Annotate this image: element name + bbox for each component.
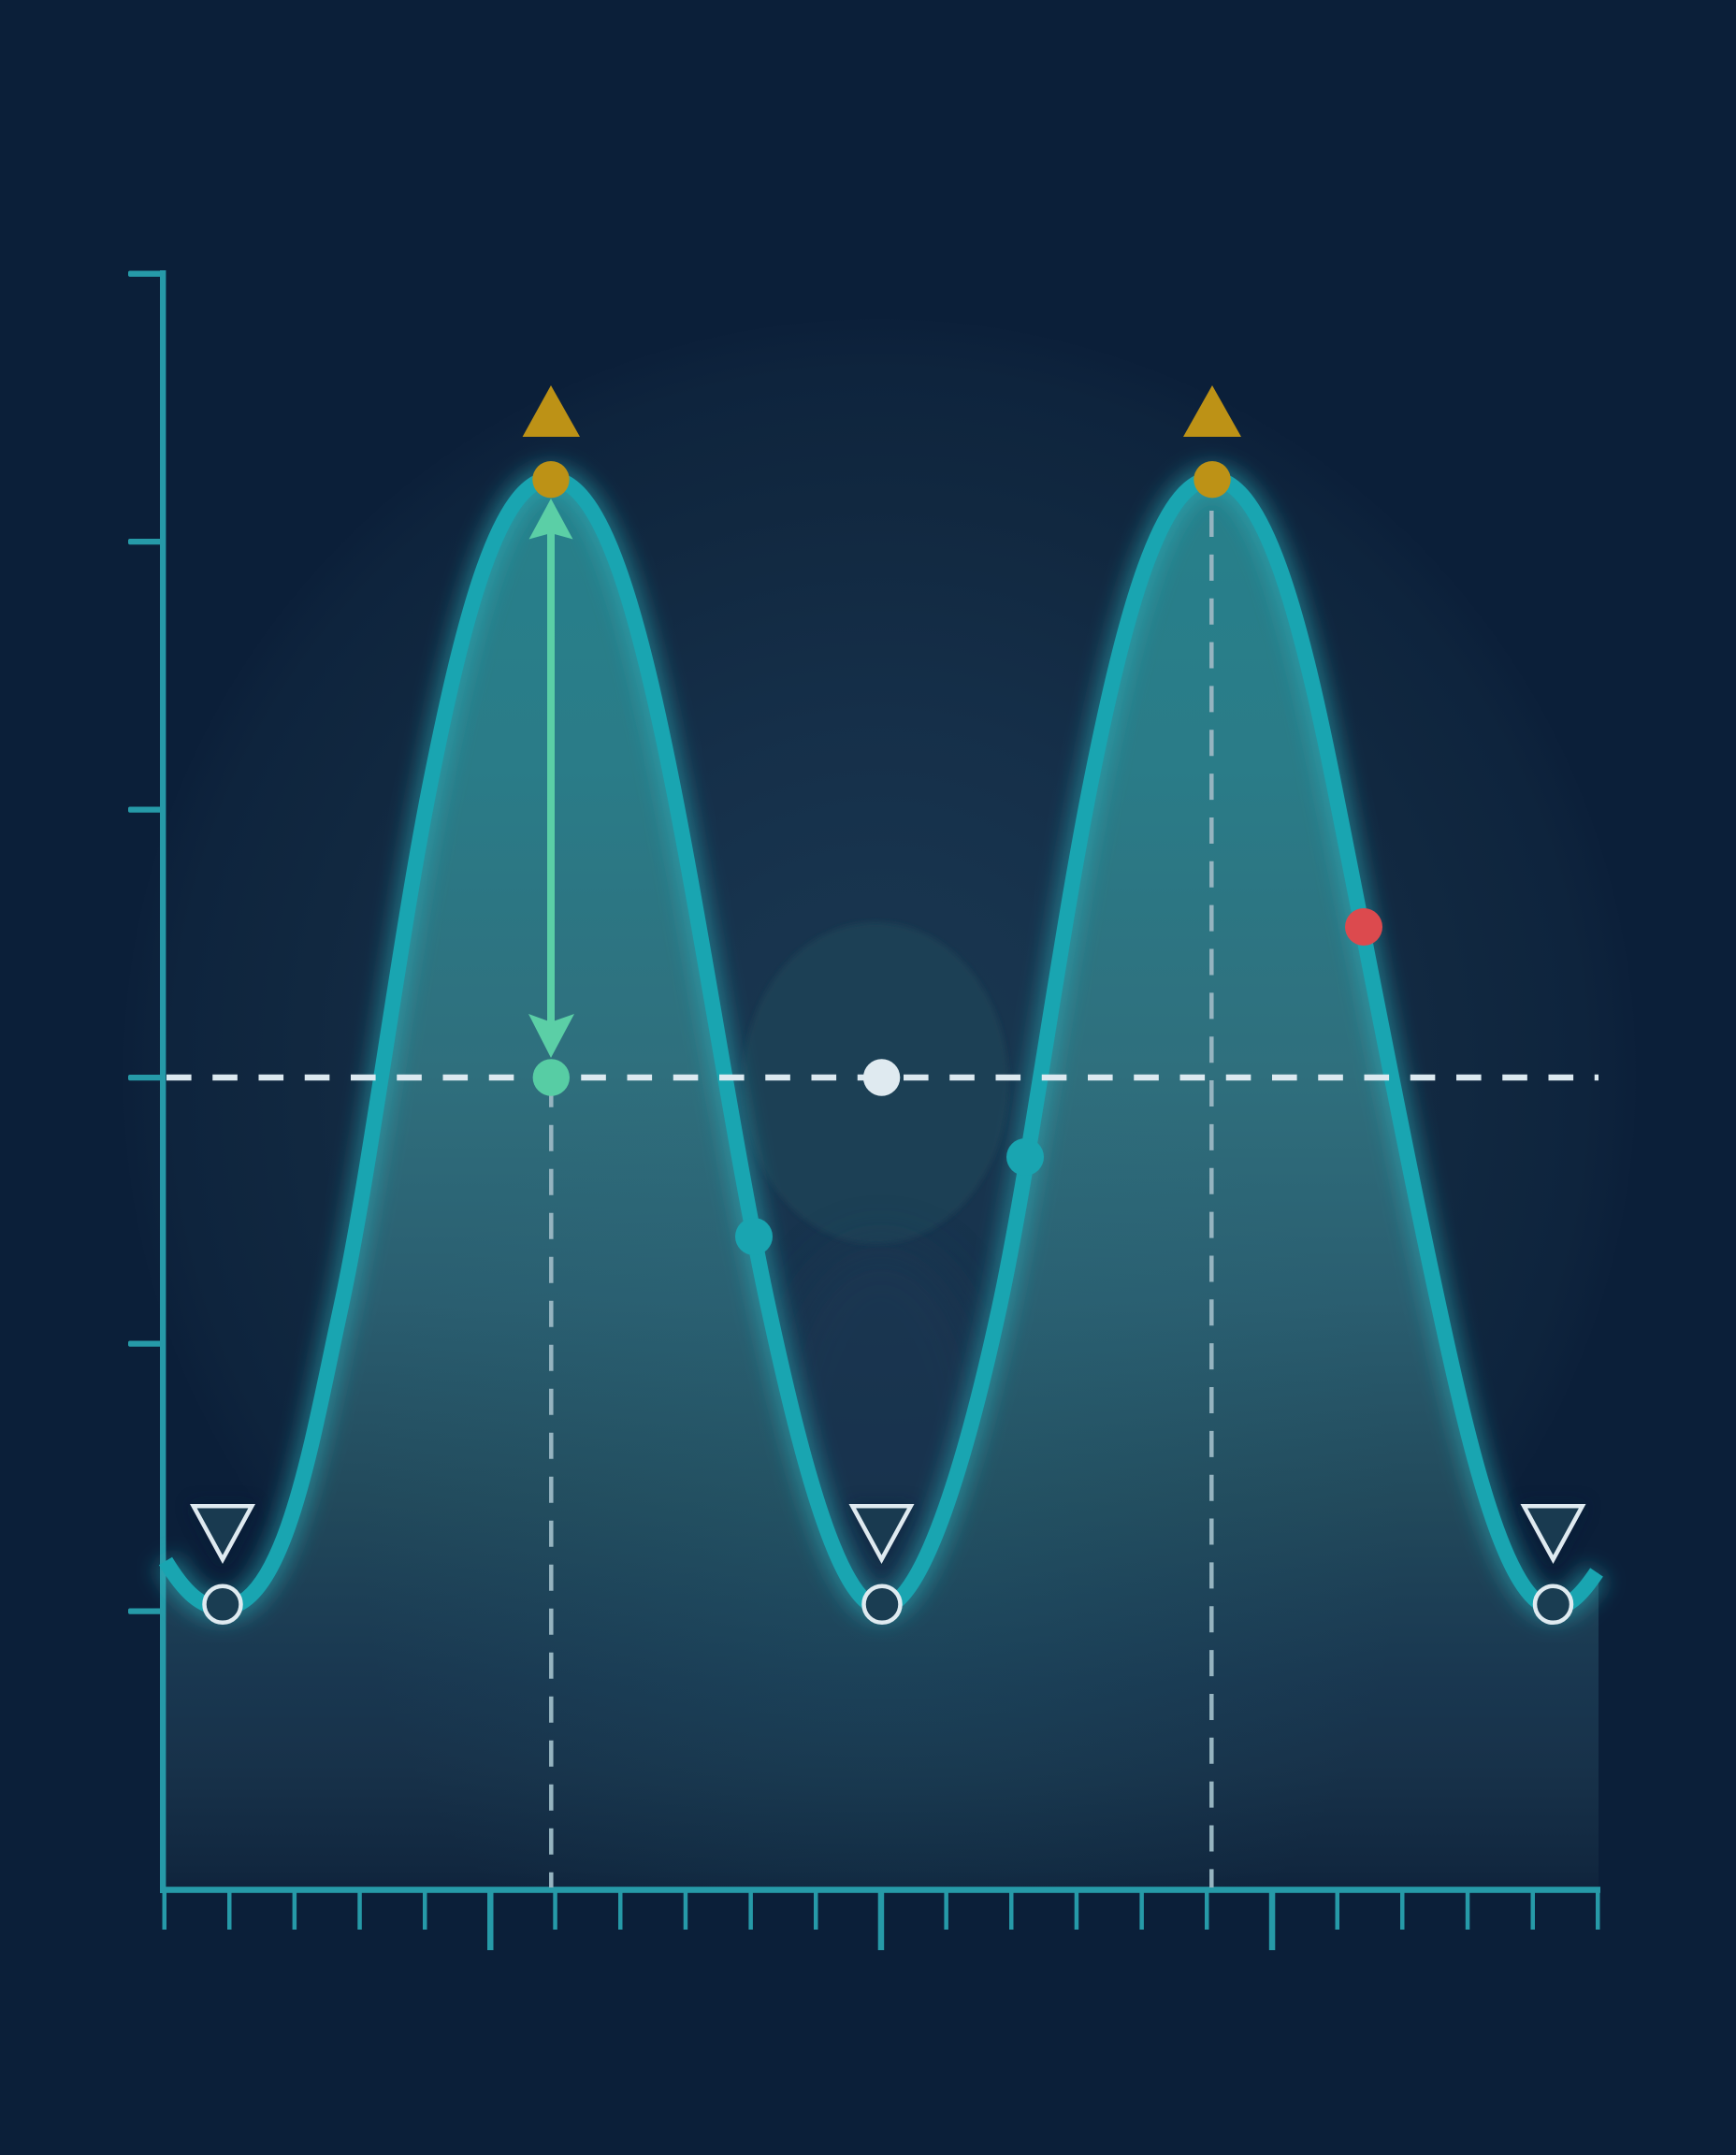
trough marker shadows: [190, 1504, 1586, 1568]
trough marker: second white triangle: [852, 1506, 911, 1559]
area fill under curve: [166, 479, 1599, 1889]
trough circle: third: [1535, 1586, 1571, 1623]
central glow blob: [743, 922, 1008, 1244]
trough circle: first: [204, 1586, 241, 1623]
lower valley glow: [769, 1244, 993, 1637]
y axis with ticks: [128, 270, 166, 1893]
peak marker: first gold triangle: [523, 385, 580, 437]
curve dot: red: [1345, 908, 1382, 946]
curve dot: teal ascending: [1006, 1138, 1044, 1176]
horizontal dashed midline: [166, 1075, 1599, 1080]
background radial glow: [122, 318, 1637, 1833]
curve glow: [166, 479, 1597, 1608]
vertical dashed guide at first peak: [549, 1081, 554, 1887]
curve dot: teal descending: [735, 1218, 773, 1255]
trough marker: first white triangle: [194, 1506, 252, 1559]
double-headed amplitude arrow: [528, 499, 574, 1058]
x axis with ticks: [160, 1887, 1600, 1950]
vertical dashed guide at second peak: [1209, 511, 1214, 1887]
midline dot: white: [863, 1059, 900, 1096]
trough circle: second: [864, 1586, 900, 1623]
peak dot: second gold: [1194, 461, 1231, 498]
area centre brightening: [166, 479, 1599, 1889]
peak marker: second gold triangle: [1183, 385, 1241, 437]
peak dot: first gold: [532, 461, 570, 498]
midline dot: green: [533, 1059, 570, 1096]
wave curve: [166, 479, 1597, 1608]
trough marker: third white triangle: [1524, 1506, 1583, 1559]
